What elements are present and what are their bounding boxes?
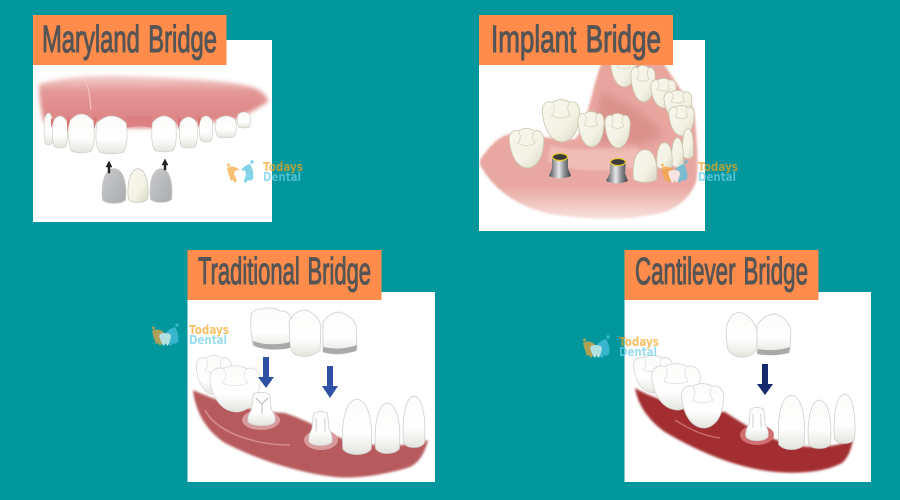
prepared stump: [740, 407, 774, 445]
arrows: [106, 159, 168, 173]
panel: Cantilever Bridge: [583, 250, 871, 482]
watermark: Cantilever: Todays: [619, 334, 659, 349]
watermark: Cantilever: [583, 334, 659, 359]
watermark: Maryland: Dental: [263, 169, 301, 184]
front teeth: [633, 129, 693, 182]
prepared stumps: [242, 392, 338, 450]
lower gum: [635, 388, 853, 473]
illustration card: Cantilever: [624, 292, 871, 482]
heading label: Traditional: Traditional Bridge: [198, 251, 371, 293]
watermark: Traditional: Dental: [189, 332, 227, 347]
heading label: Maryland: Maryland Bridge: [42, 19, 217, 61]
illustration card: Implant: [479, 40, 705, 231]
watermark: Implant: [661, 159, 738, 184]
watermark: Implant: Todays: [698, 159, 738, 174]
watermark: Traditional: Todays: [189, 322, 229, 337]
lower jaw gum: [480, 58, 697, 219]
heading label: Implant: [479, 15, 673, 65]
heading label: Cantilever: [624, 250, 818, 300]
heading label: Traditional: [188, 250, 382, 300]
lower gum: [193, 390, 428, 478]
panel: Traditional Bridge: [152, 250, 435, 482]
front teeth: [778, 394, 855, 450]
front teeth: [342, 396, 425, 455]
watermark: Traditional: [152, 322, 229, 347]
watermark: Maryland: Todays: [263, 159, 303, 174]
back teeth arch: [611, 55, 694, 136]
back molars: [196, 356, 260, 412]
watermark: Cantilever: Dental: [619, 344, 657, 359]
watermark: Maryland: [227, 159, 303, 184]
arrow: [757, 364, 773, 395]
watermark: Implant: Dental: [698, 169, 736, 184]
implant posts: [549, 154, 628, 184]
illustration card: Traditional: [188, 292, 435, 482]
three-unit implant bridge: [542, 100, 630, 148]
single molar: [509, 128, 544, 168]
crown bridge: [251, 308, 357, 356]
upper teeth: [44, 112, 251, 154]
arrows: [258, 357, 338, 398]
heading label: Maryland: [33, 15, 226, 65]
bridge prosthesis: [102, 169, 172, 203]
crown bridge: [726, 312, 791, 357]
molars: [633, 355, 724, 428]
heading label: Implant: Implant Bridge: [491, 19, 661, 61]
gum tips between teeth: [51, 116, 201, 132]
upper gum: [39, 75, 268, 128]
illustration card: Maryland: [33, 40, 272, 222]
panel: Maryland Bridge: [33, 15, 303, 222]
panel: Implant Bridge: [479, 15, 738, 231]
